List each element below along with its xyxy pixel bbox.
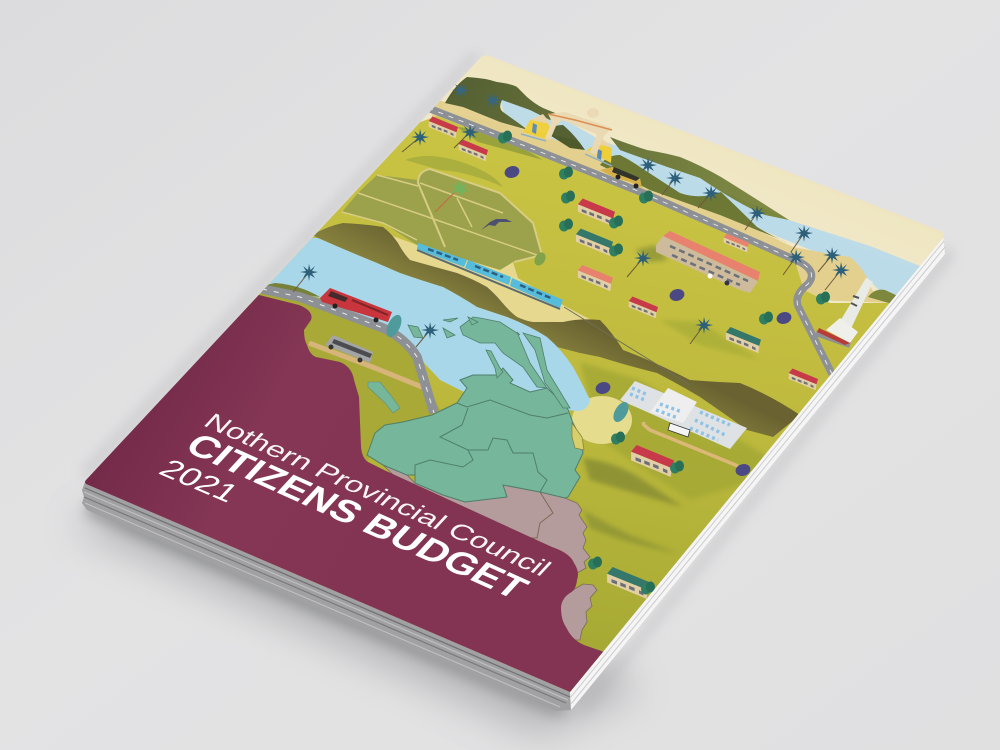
green bushes [498, 130, 830, 594]
railway line [564, 307, 690, 385]
small hill at shore [262, 283, 320, 297]
college building [656, 231, 760, 293]
clock tower [817, 278, 873, 345]
car on road [600, 167, 642, 188]
title: Nothern Provincial Council: Nothern Provincial Council [198, 408, 557, 581]
red bus [320, 288, 392, 322]
green northern province map [367, 317, 583, 502]
title: Citizens Budget: CITIZENS BUDGET [178, 427, 536, 605]
upper hills [445, 77, 900, 304]
page stack: spine side [82, 482, 571, 711]
maroon title panel [70, 295, 610, 700]
sand strip [430, 100, 895, 303]
palm in field [435, 180, 470, 212]
paddy field [342, 169, 542, 278]
far water [500, 98, 925, 302]
inland lagoon [368, 382, 400, 413]
low green hills [405, 127, 790, 553]
grey van [325, 335, 373, 363]
ambulance [668, 423, 690, 437]
cover artwork [70, 50, 960, 720]
sand under railway [390, 235, 595, 326]
farmer [481, 219, 512, 230]
blue train [417, 243, 563, 309]
cream sky [80, 50, 960, 700]
teal trees [383, 250, 632, 425]
east coast inlet [572, 423, 584, 450]
district borders south [530, 492, 553, 538]
pink district map [383, 465, 597, 640]
page stack: fore-edge side [570, 235, 945, 710]
cover top light [440, 55, 943, 270]
purple bushes [503, 164, 793, 478]
west road [262, 289, 434, 413]
title: year: 2021 [153, 454, 246, 508]
main green ground [240, 116, 890, 692]
pale sand clearing [572, 396, 632, 444]
blue lake [265, 238, 590, 411]
houses [429, 116, 818, 599]
palm trees [293, 82, 850, 347]
sand track [309, 343, 422, 387]
dirt path [643, 424, 738, 466]
hospital [620, 381, 747, 449]
gateway arch [521, 108, 613, 166]
dark hill band [312, 223, 800, 437]
left shore land [247, 284, 457, 461]
north road [428, 108, 850, 374]
